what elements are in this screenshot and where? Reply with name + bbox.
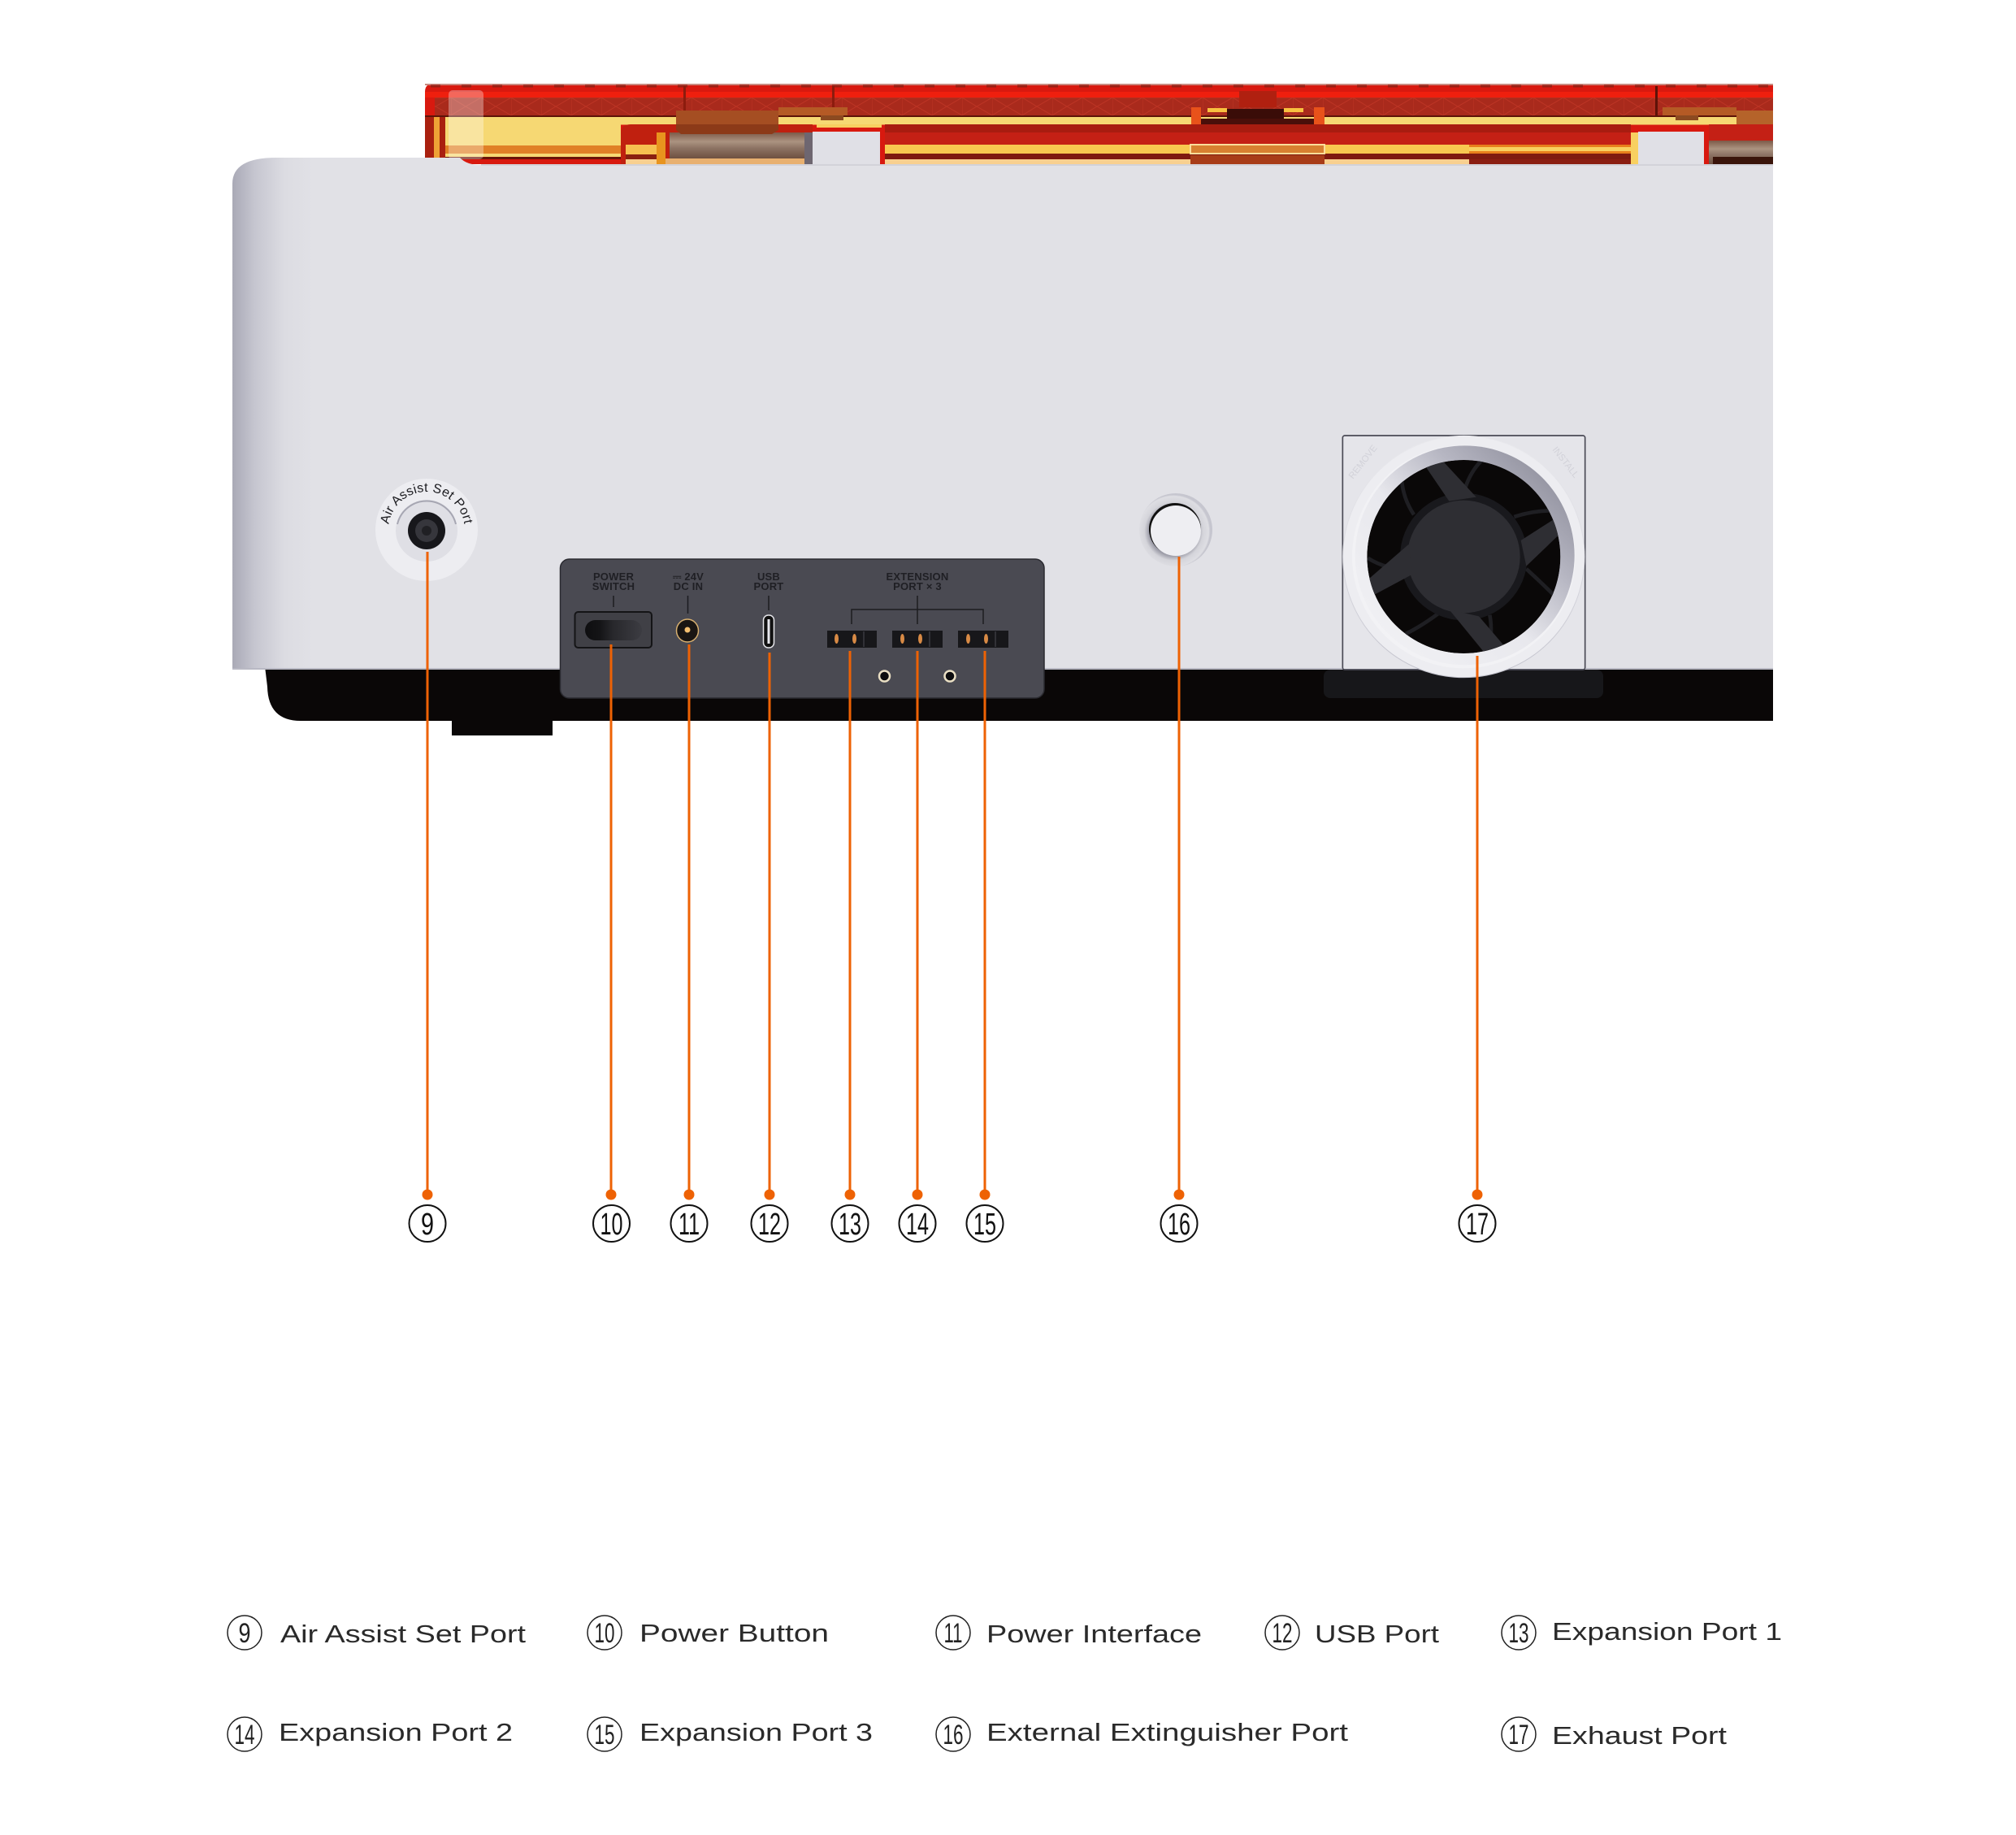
legend labels: USB Port bbox=[1315, 1620, 1439, 1648]
marker numbers: 15 bbox=[973, 1208, 996, 1242]
DC jack bbox=[676, 619, 699, 642]
panel labels: SWITCH bbox=[592, 580, 635, 592]
line 11 bbox=[684, 644, 694, 1199]
marker numbers: 12 bbox=[758, 1208, 781, 1242]
legend labels: External Extinguisher Port bbox=[986, 1718, 1348, 1746]
legend labels: Power Button bbox=[639, 1619, 829, 1647]
illustration: machine rear view bbox=[232, 84, 1773, 735]
exhaust port fan: INSTALL bbox=[1550, 445, 1580, 480]
line 9 bbox=[423, 552, 432, 1199]
red translucent lid bbox=[425, 84, 1773, 164]
centre latch bbox=[1190, 91, 1324, 164]
main body bbox=[232, 158, 1773, 670]
line 12 bbox=[764, 653, 775, 1199]
tube section bbox=[621, 124, 1631, 164]
legend bbox=[228, 1616, 1782, 1751]
panel labels: PORT bbox=[754, 580, 783, 592]
fan interior bbox=[1367, 460, 1560, 654]
marker numbers: 16 bbox=[1168, 1208, 1190, 1242]
line 10 bbox=[606, 644, 616, 1199]
legend labels: Power Interface bbox=[986, 1620, 1202, 1648]
marker numbers: 9 bbox=[421, 1208, 434, 1242]
legend labels: Expansion Port 1 bbox=[1552, 1617, 1782, 1646]
line 15 bbox=[980, 651, 990, 1199]
panel labels: PORT × 3 bbox=[893, 580, 942, 592]
legend numbers: 11 bbox=[944, 1618, 962, 1649]
legend labels bbox=[279, 1617, 1782, 1750]
power switch bbox=[575, 612, 652, 648]
right hinge bbox=[1631, 107, 1773, 164]
black base bbox=[265, 666, 1773, 735]
marker numbers: 13 bbox=[839, 1208, 861, 1242]
marker numbers bbox=[421, 1208, 1489, 1242]
panel labels: DC IN bbox=[674, 580, 703, 592]
panel labels: USB bbox=[757, 570, 780, 583]
panel labels bbox=[592, 570, 948, 592]
legend numbers: 16 bbox=[943, 1720, 964, 1750]
marker numbers: 10 bbox=[600, 1208, 622, 1242]
exhaust port fan: REMOVE bbox=[1347, 443, 1380, 481]
legend labels: Exhaust Port bbox=[1552, 1721, 1727, 1750]
panel labels: EXTENSION bbox=[887, 570, 948, 583]
legend numbers bbox=[234, 1618, 1529, 1750]
legend numbers: 10 bbox=[595, 1618, 614, 1649]
marker numbers: 11 bbox=[679, 1208, 700, 1242]
legend numbers: 15 bbox=[595, 1720, 614, 1750]
legend numbers: 14 bbox=[234, 1720, 255, 1750]
curved label: Air Assist Set Port bbox=[380, 483, 473, 525]
legend labels: Expansion Port 2 bbox=[279, 1718, 513, 1746]
connector panel bbox=[561, 559, 1044, 698]
left hinge bbox=[665, 107, 880, 164]
numbered markers bbox=[410, 1205, 1495, 1242]
panel labels: POWER bbox=[593, 570, 634, 583]
air assist port bbox=[375, 479, 478, 581]
legend numbers: 12 bbox=[1272, 1618, 1292, 1649]
legend numbers: 13 bbox=[1508, 1618, 1529, 1649]
line 13 bbox=[845, 651, 855, 1199]
line 16 bbox=[1173, 557, 1185, 1199]
exhaust port fan bbox=[1342, 436, 1585, 678]
legend numbers: 17 bbox=[1508, 1720, 1529, 1750]
callout lines bbox=[423, 552, 1482, 1199]
legend numbers: 9 bbox=[239, 1618, 250, 1649]
panel labels: ⎓ 24V bbox=[673, 570, 704, 583]
marker numbers: 14 bbox=[906, 1208, 929, 1242]
line 17 bbox=[1472, 656, 1482, 1199]
legend labels: Expansion Port 3 bbox=[639, 1718, 873, 1746]
extinguisher port button bbox=[1139, 493, 1212, 566]
line 14 bbox=[912, 651, 923, 1199]
USB-C port bbox=[764, 615, 774, 648]
marker numbers: 17 bbox=[1466, 1208, 1489, 1242]
legend circles bbox=[228, 1616, 1536, 1751]
extension ports bbox=[827, 631, 1008, 681]
legend labels: Air Assist Set Port bbox=[280, 1620, 526, 1648]
